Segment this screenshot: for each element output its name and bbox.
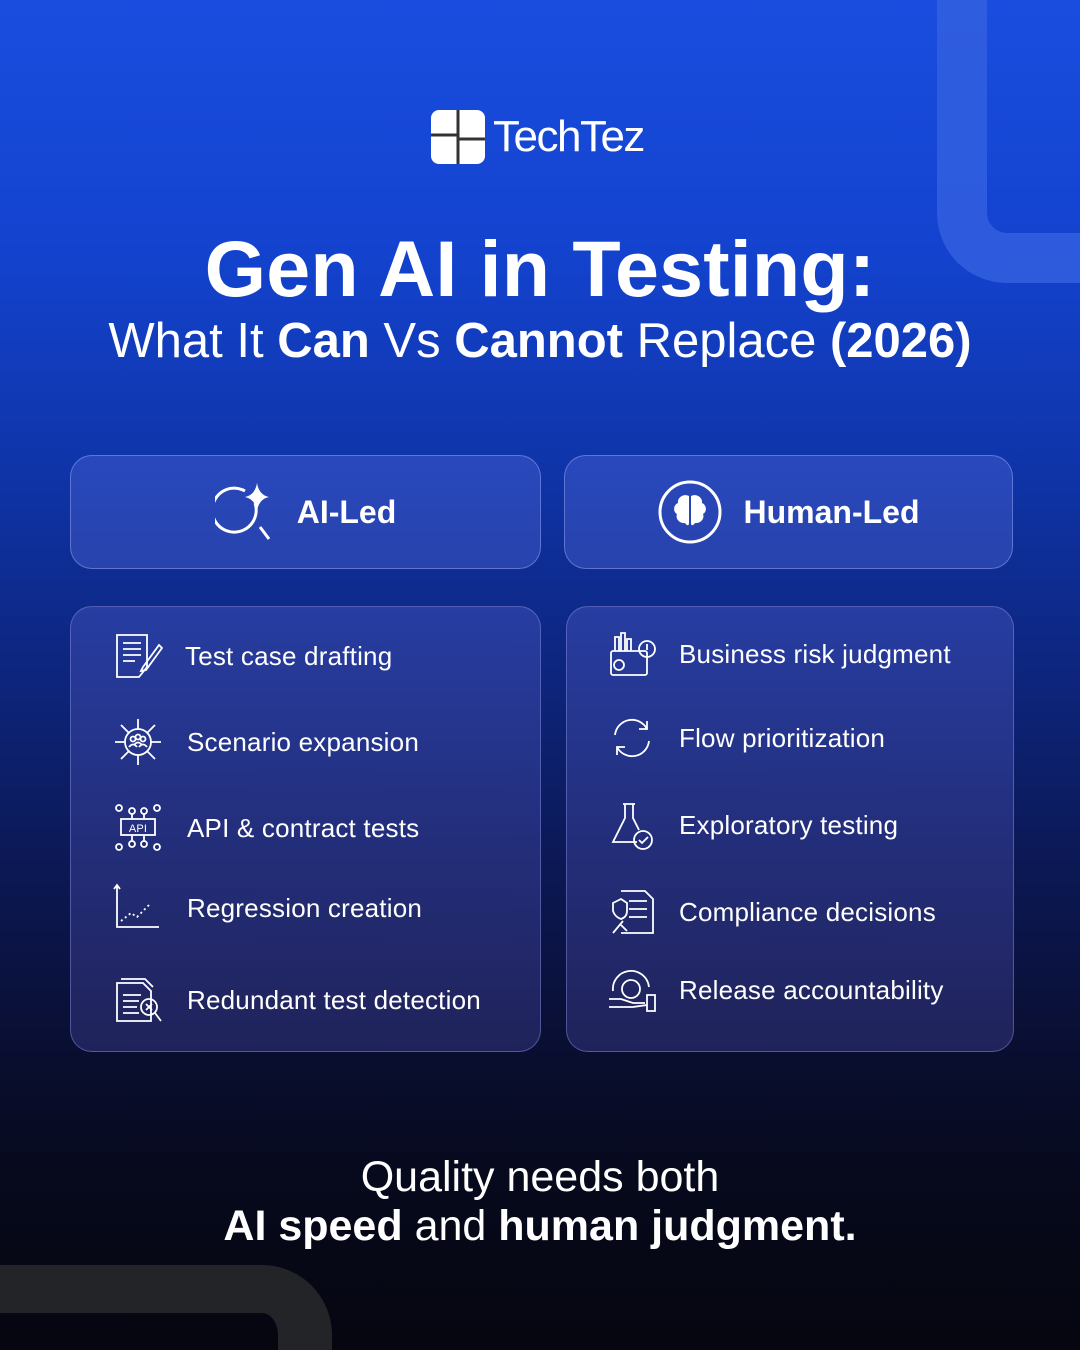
- item: exploratory testing: [612, 803, 898, 850]
- item: business risk judgment: Business risk judgment: [679, 638, 951, 668]
- footer tagline: Quality needs both: [361, 1153, 719, 1201]
- item: compliance decisions: Compliance decisions: [679, 896, 936, 926]
- logo: TechTez: [493, 112, 644, 161]
- item: API tests: API & contract tests: [187, 812, 419, 842]
- item: flow prioritization: Flow prioritization: [679, 722, 885, 752]
- header: AI-Led: [70, 455, 541, 569]
- item: scenario expansion: Scenario expansion: [187, 726, 419, 756]
- footer tagline: AI speed and human judgment.: [223, 1202, 857, 1250]
- item: business risk judgment: [610, 632, 951, 676]
- item: exploratory testing: Exploratory testing: [679, 810, 898, 840]
- item: redundant test detection: Redundant test detection: [187, 984, 481, 1014]
- decoration: bottom-left frame: [0, 1265, 332, 1350]
- panel: Human-led tasks: [566, 606, 1014, 1052]
- logo: [431, 110, 644, 164]
- item: compliance decisions: [612, 890, 936, 934]
- item: flow prioritization: [614, 718, 885, 758]
- item: test case drafting: [116, 634, 392, 678]
- item: release accountability: Release accountability: [679, 974, 944, 1004]
- icon: brain: [658, 480, 722, 544]
- item: regression creation: [113, 884, 422, 928]
- header: Human-Led: [564, 455, 1013, 569]
- header: AI-Led: AI-Led: [297, 494, 396, 530]
- item: API tests: API: [129, 823, 147, 835]
- header: Human-Led: Human-Led: [744, 494, 920, 530]
- item: test case drafting: Test case drafting: [185, 640, 392, 670]
- footer tagline: [223, 1153, 857, 1250]
- decoration: top-right frame: [937, 0, 1080, 283]
- item: regression creation: Regression creation: [187, 892, 422, 922]
- title: Gen AI in Testing:: [205, 224, 875, 313]
- item: release accountability: [609, 970, 944, 1012]
- panel: AI-led tasks: [70, 606, 541, 1052]
- item: API tests: [115, 804, 419, 851]
- item: redundant test detection: [116, 978, 481, 1022]
- item: scenario expansion: [115, 719, 419, 765]
- subtitle: What It Can Vs Cannot Replace (2026): [108, 314, 972, 368]
- icon: AI search: [215, 483, 270, 540]
